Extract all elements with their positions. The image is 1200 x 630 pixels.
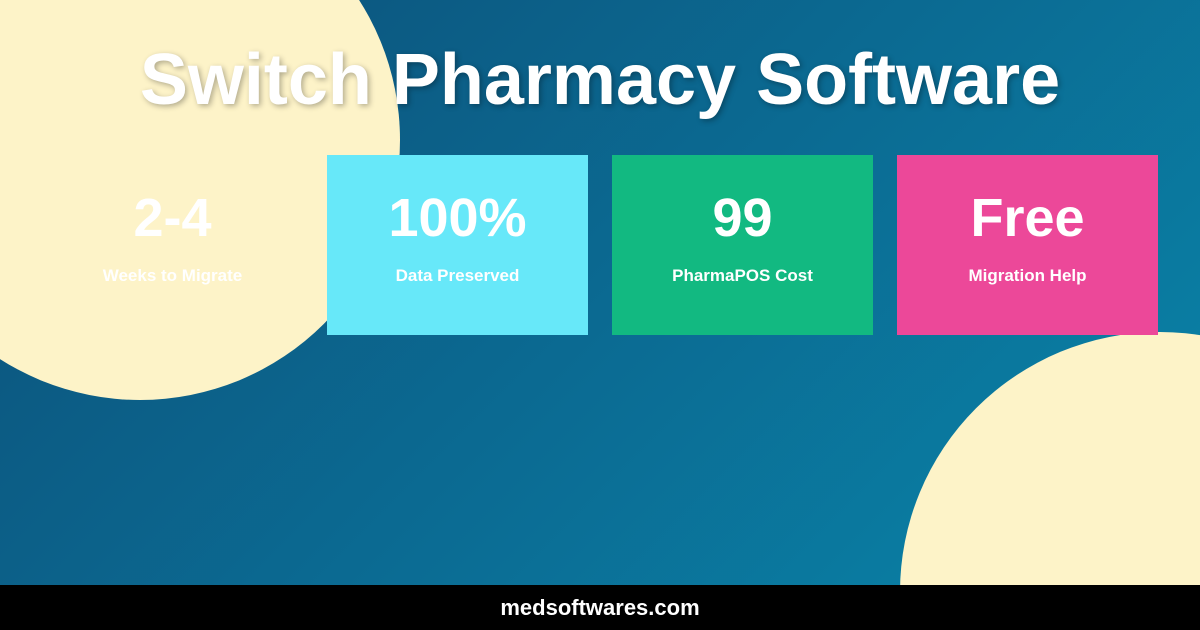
footer: [0, 585, 1200, 630]
card: migration help: Migration Help: [968, 266, 1087, 285]
card: data preserved: Data Preserved: [396, 266, 519, 285]
card: migration help: [897, 155, 1158, 335]
card: pharmapos cost: 99: [712, 188, 773, 248]
card: pharmapos cost: [612, 155, 873, 335]
card: data preserved: 100%: [388, 188, 527, 248]
card: data preserved: [327, 155, 588, 335]
card: weeks to migrate: [42, 155, 303, 335]
footer: medsoftwares.com: [500, 595, 700, 620]
card: weeks to migrate: 2-4: [133, 188, 212, 248]
card: pharmapos cost: PharmaPOS Cost: [672, 266, 813, 285]
title: Switch Pharmacy Software: [140, 40, 1060, 120]
card: weeks to migrate: Weeks to Migrate: [103, 266, 242, 285]
decorative circle top-left: [0, 0, 400, 400]
decorative circle bottom-right: [900, 332, 1200, 630]
card: migration help: Free: [970, 188, 1085, 248]
